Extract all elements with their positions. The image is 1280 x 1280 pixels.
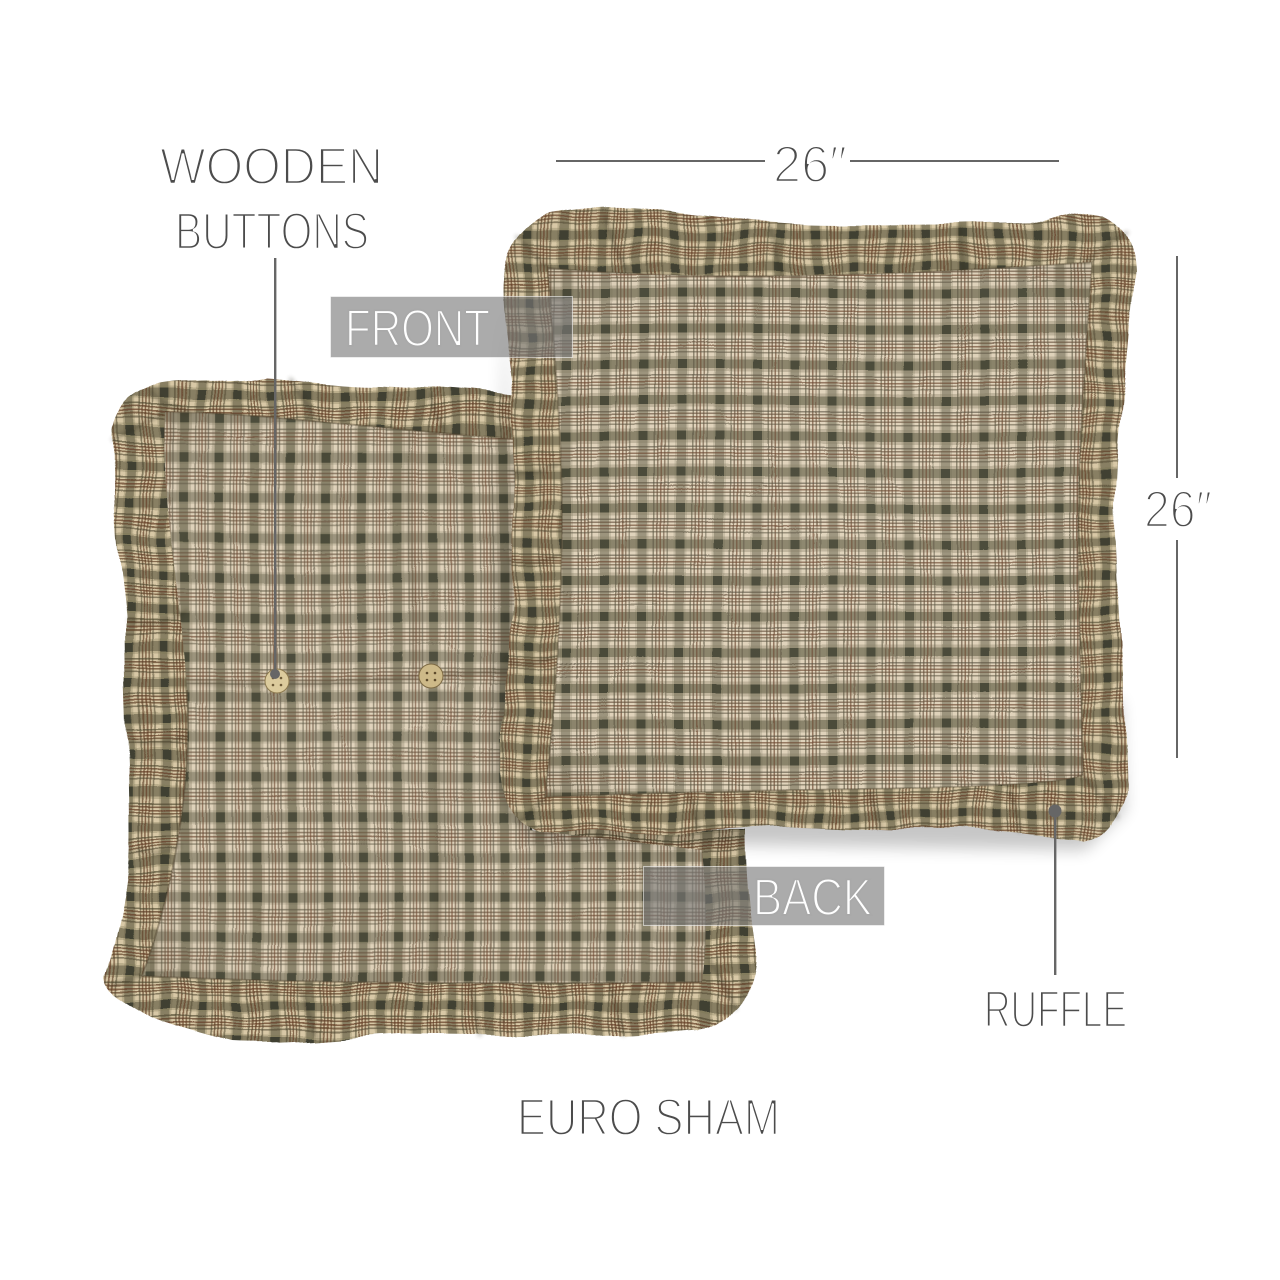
dimension: height 26 inches: 26″ — [1144, 481, 1212, 539]
pillow: back of sham — [90, 360, 770, 1060]
back panel plaid — [142, 412, 706, 984]
label: wooden buttons: WOODEN — [160, 138, 383, 196]
back ruffle folds — [110, 378, 736, 1040]
tag: back: BACK — [753, 869, 872, 927]
wooden button left — [265, 669, 289, 693]
label: wooden buttons — [160, 138, 383, 261]
dimension: width 26 inches: 26″ — [773, 136, 847, 194]
front ruffle — [500, 206, 1137, 842]
front panel plaid — [530, 250, 1100, 810]
caption: euro sham: EURO SHAM — [517, 1089, 780, 1147]
label: ruffle: RUFFLE — [984, 981, 1127, 1039]
wooden button right — [419, 664, 443, 688]
tag: front — [330, 296, 572, 358]
back seam — [142, 412, 702, 983]
infographic: euro sham — [103, 147, 1210, 1134]
tag: front: FRONT — [345, 300, 490, 358]
pillow: front of sham — [500, 206, 1137, 842]
leader: ruffle — [1048, 804, 1062, 975]
back ruffle — [90, 360, 770, 1060]
front ruffle folds — [506, 215, 1128, 832]
label: wooden buttons: BUTTONS — [175, 203, 369, 261]
leader: wooden buttons — [270, 258, 280, 679]
shadow under front pillow — [495, 300, 1125, 850]
front seam — [545, 262, 1092, 797]
tag: back — [644, 866, 884, 927]
